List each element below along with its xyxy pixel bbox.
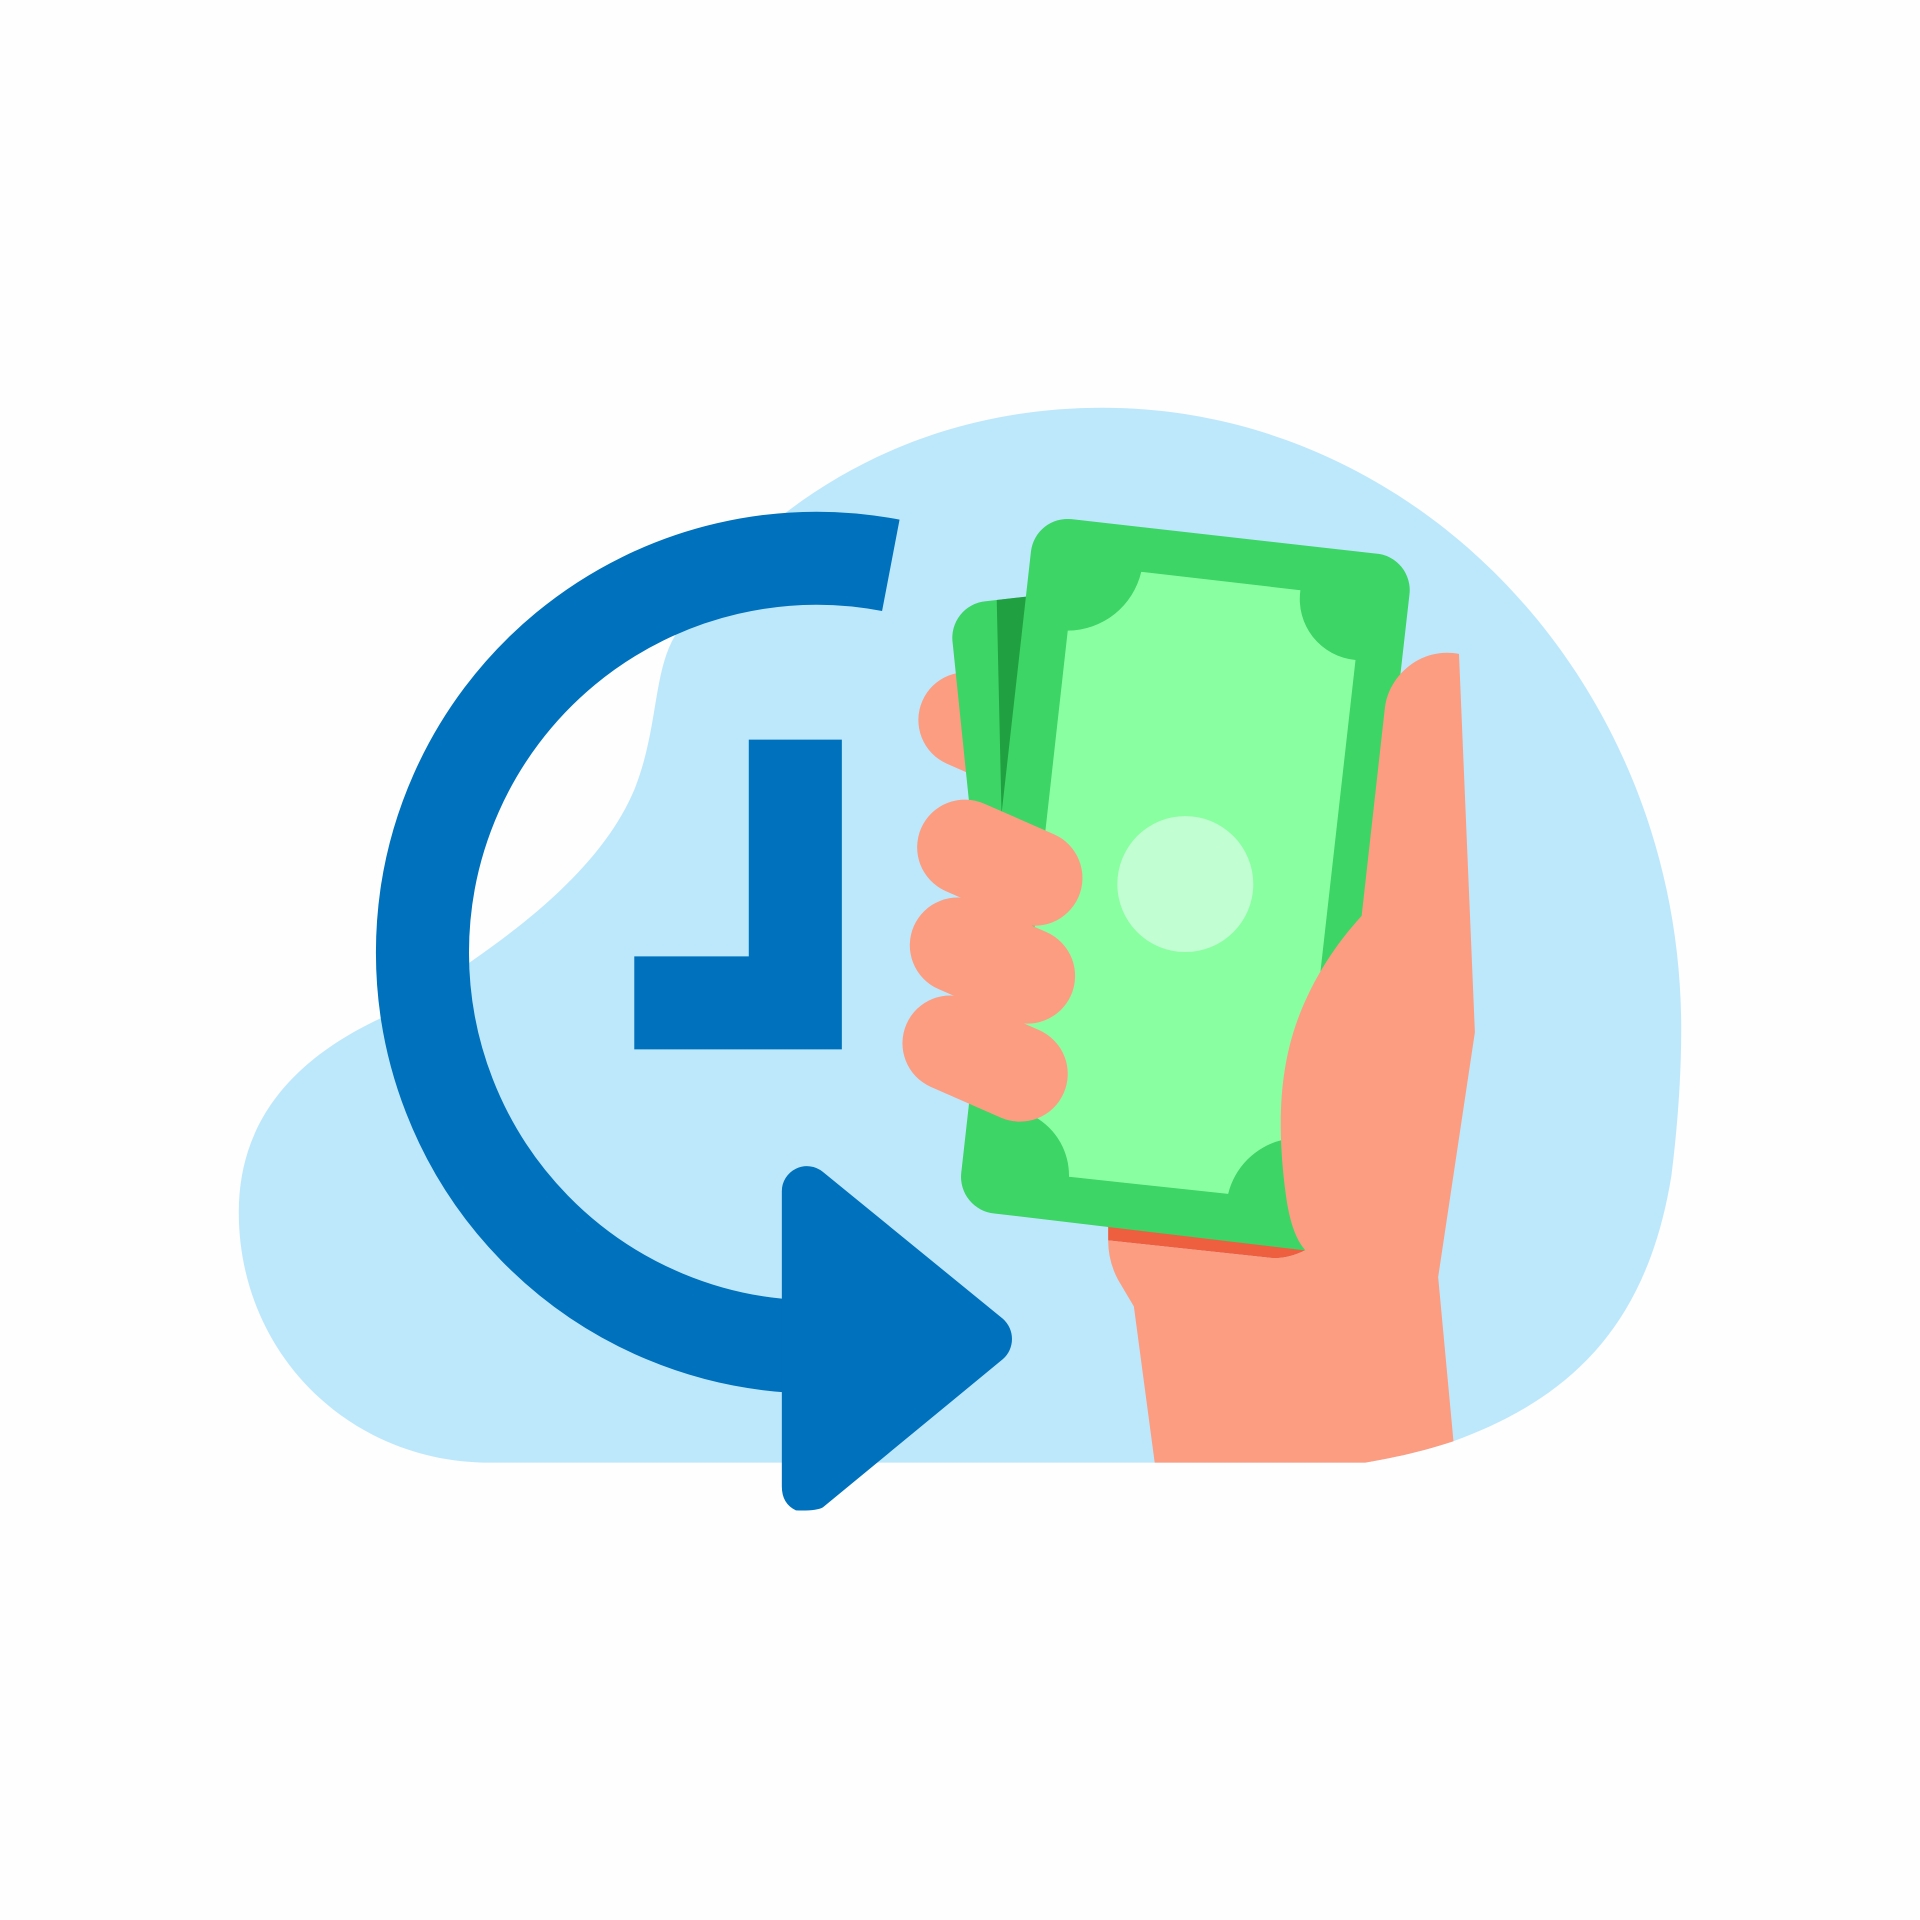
back finger [966,720,1036,751]
note centre circle [1117,816,1253,952]
background cloud blob [239,408,1681,1463]
front fingers [950,847,1035,1074]
back note shadow strip [997,596,1029,818]
clock hands [634,740,842,1049]
hand and thumb [1108,653,1475,1463]
note inner panel [1015,572,1356,1194]
palm edge shadow [1108,1218,1310,1258]
note body [961,519,1410,1254]
back banknote [952,594,1053,857]
circular arrow [422,558,1012,1510]
arrow head [782,1166,1012,1510]
back note body [952,594,1053,857]
finger two [958,945,1027,976]
finger three [950,1043,1020,1074]
arrow ring [422,558,891,1347]
finger one [965,847,1035,878]
front banknote [961,519,1410,1254]
